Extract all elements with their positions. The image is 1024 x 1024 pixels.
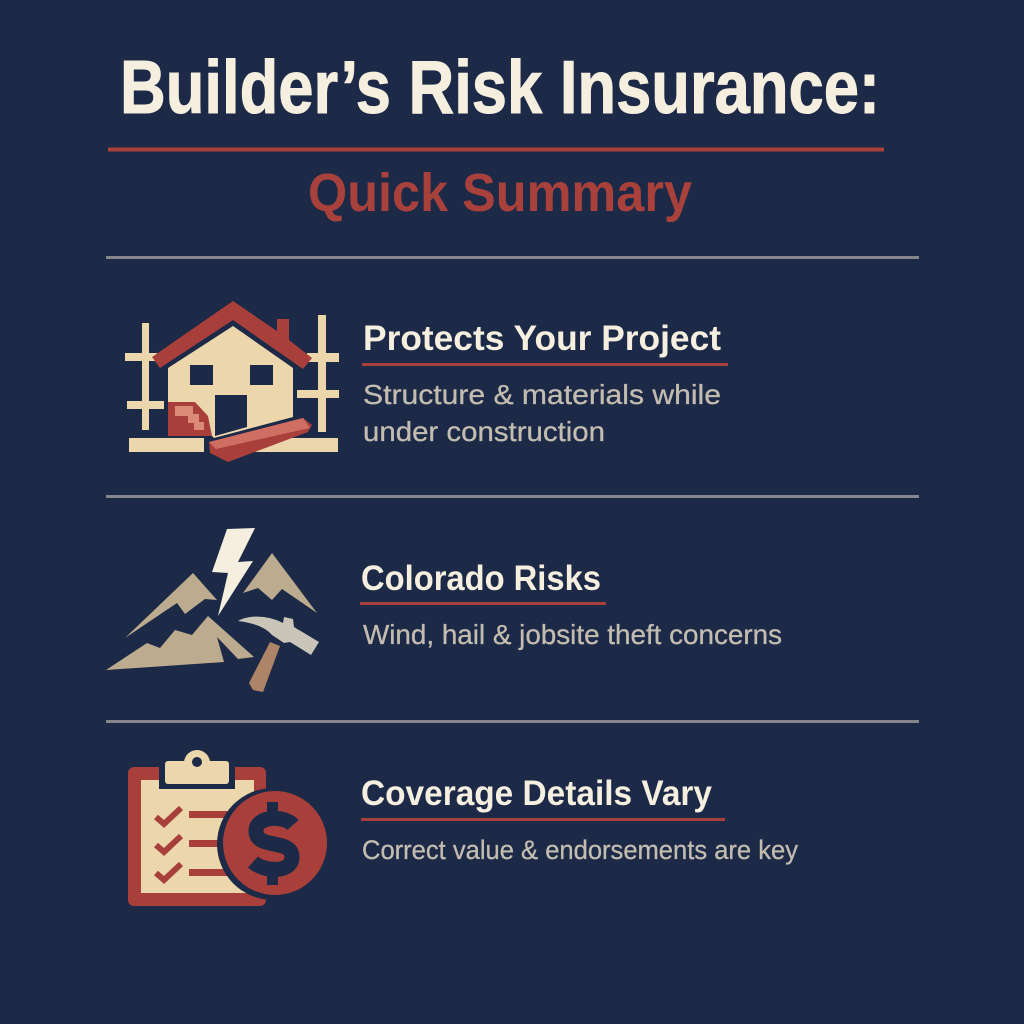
icon: mountains, lightning and hammer [106, 528, 319, 692]
description: coverage details vary: Correct value & endorsements are key [362, 835, 798, 865]
icon: house under construction [125, 301, 339, 462]
heading: colorado risks: Colorado Risks [361, 559, 601, 598]
underline: coverage details vary [361, 818, 725, 821]
heading: protects your project: Protects Your Project [363, 319, 721, 358]
subtitle: Quick Summary [308, 163, 692, 223]
description: protects your project: under construction [363, 416, 605, 447]
title: Builder’s Risk Insurance: [120, 45, 880, 129]
description: colorado risks: Wind, hail & jobsite theft concerns [363, 619, 782, 650]
heading: coverage details vary: Coverage Details Vary [361, 774, 712, 813]
title underline [108, 148, 884, 152]
description: protects your project [363, 379, 721, 447]
icon: clipboard with dollar coin [128, 750, 329, 906]
underline: colorado risks [360, 602, 606, 605]
underline: protects your project [362, 363, 728, 366]
description: protects your project: Structure & materials while [363, 379, 721, 410]
